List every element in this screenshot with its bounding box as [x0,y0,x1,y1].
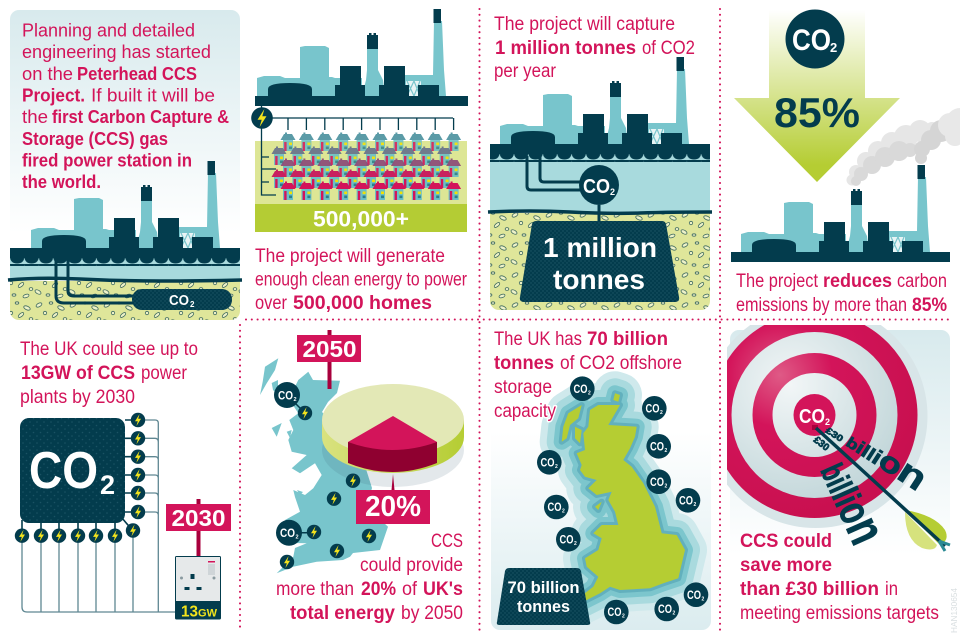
icons: offshore CO2 stores: CO [679,496,693,508]
perspective text: £30 billion [810,406,934,552]
text: 13GW caption: 13GW of CCS [21,363,135,384]
text: planning paragraph: fired power station in [22,150,192,170]
text: 20% caption: CCS [431,531,463,552]
icons: CO2 and lightning on map [274,382,376,569]
text: capture caption: 1 million tonnes [495,38,636,59]
text: 20% caption: 20% [361,579,396,600]
icon: 13GW wall socket: GW [198,608,218,620]
panel: 500,000 homes [251,9,468,314]
icon: 13GW wall socket: 13 [181,604,198,620]
badge: 70 billion tonnes [497,568,590,625]
text: storage caption: tonnes [494,353,554,374]
storage figure: 1 million tonnes: tonnes [553,264,645,295]
text: capture caption: of CO2 [642,38,695,59]
text: 20% caption: of [402,579,418,600]
icons: offshore CO2 stores: 2 [664,484,668,490]
arrow: downward reduction [734,10,900,182]
CO2 circle [786,10,844,68]
text: 20% caption: by 2050 [401,603,463,624]
callout: 20%: 20% [365,491,421,523]
panel: save more than £30 billion [727,325,957,632]
text: 13GW caption: power [141,363,188,384]
text: 13GW caption: The UK could see up to [20,339,198,360]
badge: 70 billion tonnes: tonnes [517,598,570,616]
CO2 circle: CO [583,176,610,198]
text: 20% caption: more than [276,579,354,600]
text: planning paragraph: Peterhead CCS [77,64,197,84]
panel: 70 billion tonnes storage [491,325,711,630]
text: £30 billion caption: than £30 billion [740,579,879,600]
icons: offshore CO2 stores: CO [646,404,660,416]
icons: offshore CO2 stores: 2 [562,508,565,514]
smoke plumes [846,108,960,186]
text: clean energy caption: The project will generate [255,246,445,267]
text: 20% caption [276,531,463,624]
figure: 500,000+: 500,000+ [313,206,409,232]
text: planning paragraph: Planning and detailed [22,20,195,40]
text: planning paragraph: first Carbon Capture & [52,107,229,127]
sign: 2050: 2050 [302,336,356,362]
text: 13GW caption: plants by 2030 [20,387,135,408]
CO2 bullseye label: CO [799,406,825,428]
text: 20% caption: could provide [360,555,463,576]
text: planning paragraph: on the [22,64,73,84]
icons: offshore CO2 stores: CO [548,502,562,514]
panel: 13GW of CCS by 2030 [15,339,231,620]
CO2 circle: 2 [830,40,837,55]
text: planning paragraph: the [22,107,48,127]
icons: offshore CO2 stores: CO [574,384,588,396]
text: storage caption: 70 billion [587,329,668,350]
text: clean energy caption: 500,000 homes [293,293,432,314]
panel: reduces carbon emissions by 85% [731,10,960,316]
icons: offshore CO2 stores: 2 [588,390,591,396]
icons: offshore CO2 stores: CO [650,442,664,454]
text: £30 billion caption: save more [740,555,832,576]
CO2 storage pill: 2 [190,300,195,309]
text: reduces caption: carbon [897,271,947,292]
text: storage caption: of CO2 offshore [560,353,682,374]
target [727,325,928,528]
panel: 20% of UK total energy by 2050 [260,330,464,624]
panel: planning and detailed engineering [8,10,242,320]
text: £30 billion caption [740,531,939,624]
text: planning paragraph: the world. [22,172,101,192]
text: storage caption: storage [494,377,552,398]
perspective text: £30 billion: £30 [811,435,831,454]
sign: 2050 [297,330,361,389]
icons: CO2 and lightning on map: CO [280,526,295,540]
icons: CO2 and lightning on map: CO [278,388,293,402]
icons: offshore CO2 stores [537,376,708,624]
icon: lightning node [251,107,273,129]
icons: offshore CO2 stores: 2 [660,410,663,416]
power station [731,165,950,262]
sign: 2030 [166,499,231,559]
text: storage caption: The UK has [494,329,582,350]
sign: 2030: 2030 [172,505,226,531]
icons: offshore CO2 stores: CO [658,604,672,616]
text: £30 billion caption: meeting emissions targets [740,603,939,624]
text: storage caption [494,329,682,422]
text: clean energy caption: over [255,293,288,314]
CO2 circle [579,165,619,205]
text: 20% caption: UK's [423,579,463,600]
arrow: into bullseye [812,425,950,551]
panel background [491,325,711,630]
icons: offshore CO2 stores: CO [687,590,701,602]
map: UK with offshore contours [562,393,685,602]
text: capture caption [494,14,695,82]
CO2 chip: 2 [100,470,115,500]
text: reduces caption: emissions by more than [736,295,907,316]
CO2 chip: CO [29,442,98,500]
text: £30 billion caption: CCS could [740,531,832,552]
map: UK [260,358,388,573]
callout: 20% [356,474,430,524]
storage figure: 1 million tonnes: 1 million [543,232,657,263]
icons: lightning nodes [15,413,145,543]
illustration: power station above seabed with CO2 store [10,161,240,320]
panel background [10,10,240,320]
CO2 chip [20,418,138,536]
badge: 70 billion tonnes: 70 billion [508,579,580,597]
icons: offshore CO2 stores: 2 [672,610,676,616]
text: reduces caption: The project [736,271,819,292]
icons: offshore CO2 stores: CO [540,458,555,470]
chart: pie with 20% slice [322,384,464,487]
text: reduces caption: 85% [912,295,947,316]
text: £30 billion caption: in [885,579,898,600]
text: 13GW caption [20,339,198,408]
CO2 storage pill: CO [169,293,189,309]
perspective text: £30 billion: billion [810,451,898,552]
text: capture caption: per year [494,61,557,82]
icons: offshore CO2 stores: 2 [694,502,696,508]
text: capture caption: The project will capture [494,14,675,35]
icons: offshore CO2 stores: 2 [574,541,577,547]
CO2 circle: 2 [610,187,615,197]
text: clean energy caption [255,246,468,314]
CO2 bullseye label: 2 [825,417,830,427]
text: storage caption: capacity [494,401,556,422]
icons: CO2 and lightning on map: 2 [294,397,297,403]
figure: 85%: 85% [774,89,860,136]
icons: offshore CO2 stores: 2 [555,464,558,470]
text: clean energy caption: enough clean energy to power [255,270,468,290]
text: 20% caption: total energy [290,603,395,624]
icons: offshore CO2 stores: 2 [664,448,668,454]
icons: offshore CO2 stores: 2 [702,596,704,602]
housing field [255,105,467,232]
power station with storage [488,57,712,310]
power station [255,9,468,106]
storage figure: 1 million tonnes [520,221,679,302]
icons: offshore CO2 stores: CO [608,607,622,619]
text: reduces caption [736,271,947,316]
wiring [22,420,176,612]
icons: CO2 and lightning on map: 2 [296,534,299,540]
CO2 storage pill [132,289,232,310]
text: planning paragraph: Project. [22,86,85,106]
icons: offshore CO2 stores: CO [560,534,574,546]
text: planning paragraph: If built it will be [91,86,215,106]
icon: 13GW wall socket [175,556,221,620]
text: reduces caption: reduces [823,271,892,292]
icons: offshore CO2 stores: 2 [622,614,625,620]
text: planning paragraph: engineering has started [22,42,211,62]
reference code: HAN130654 [949,588,959,633]
panel: capture 1 million tonnes [488,14,712,310]
CO2 circle: CO [792,24,831,57]
icons: offshore CO2 stores: CO [650,477,664,489]
text: planning paragraph: Storage (CCS) gas [22,129,168,149]
perspective text: £30 billion: £30billion [821,406,934,499]
panel background [730,330,950,630]
text: planning paragraph [22,20,229,192]
